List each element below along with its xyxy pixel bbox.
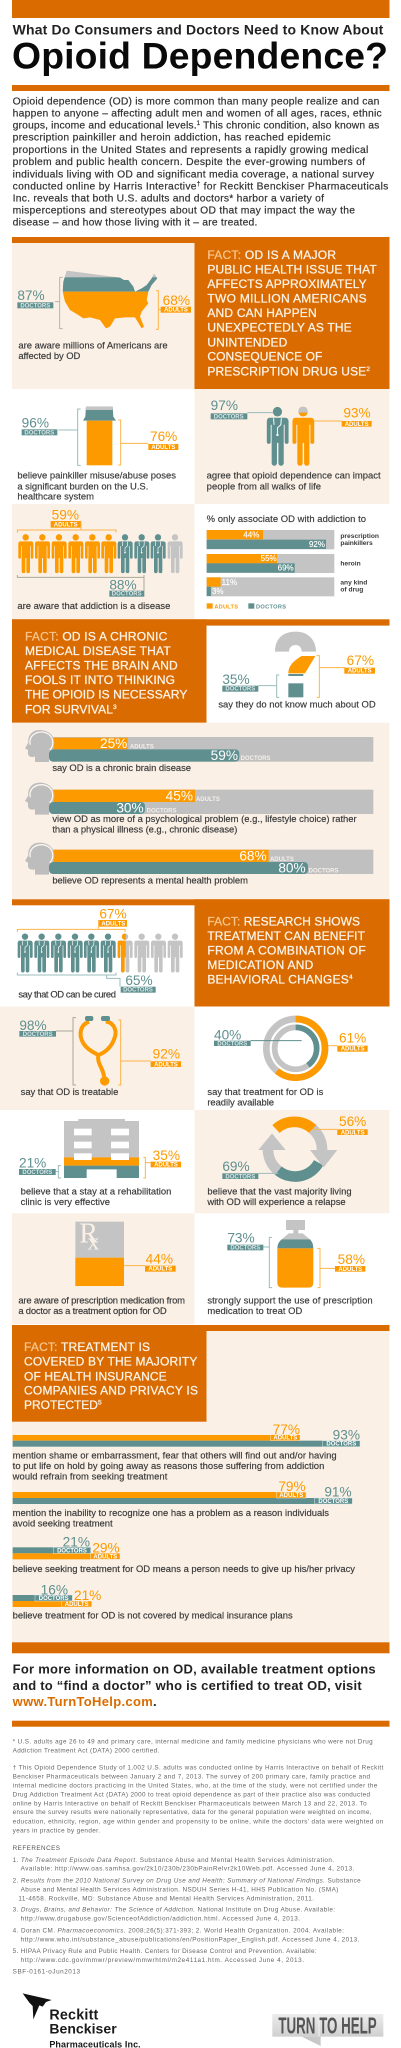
footnotes: [13, 1738, 384, 1835]
intro paragraph: This chronic condition, also known as: [200, 121, 379, 132]
stat: 58% adults: ADULTS: [338, 1267, 362, 1273]
references: Available: http://www.oas.samhsa.gov/2k10/230b/230bPainRelvr2k10Web.pdf. Accessed June 4, 2013.: [21, 1866, 355, 1873]
stat: 59% adults: 59%: [52, 507, 79, 522]
orange divider above fourth fact: [12, 1325, 390, 1331]
caption: healthcare system: [17, 490, 94, 501]
icon: row of ten people: [18, 933, 183, 972]
stat: 65% doctors: DOCTORS: [123, 988, 153, 994]
stat: 92% adults: ADULTS: [154, 1062, 178, 1068]
panel: fact 1: PUBLIC HEALTH ISSUE THAT: [207, 262, 377, 276]
panel: map, millions affected: [12, 243, 194, 389]
row: shame or embarrassment: 93%: [333, 1427, 360, 1442]
caption: [18, 1295, 185, 1316]
footnotes: Benckiser Pharmaceuticals between January 2 and 7, 2013. The survey of 200 primary care, family practice and: [13, 1773, 370, 1780]
intro paragraph: Opioid dependence (OD) is more common than many people realize and can: [13, 96, 380, 107]
row: not covered by insurance: [13, 1582, 293, 1621]
references: 11-4658. Rockville, MD: Substance Abuse and Mental Health Services Administration, 2011.: [18, 1895, 314, 1902]
row: give up privacy: DOCTORS: [57, 1548, 87, 1554]
intro paragraph: [13, 96, 388, 229]
stat: 76% adults: ADULTS: [151, 445, 175, 451]
row: shame or embarrassment: would refrain from seeking treatment: [12, 1471, 168, 1482]
panel: fact 3: [194, 899, 390, 1006]
row: inability to recognize: DOCTORS: [318, 1499, 348, 1505]
panel: fact 4: OF HEALTH INSURANCE: [24, 1369, 167, 1383]
footnotes: years in practice by gender.: [13, 1828, 100, 1835]
footnotes: internal medicine doctors practicing in the United States, who, at the time of the study, were not certified under the: [13, 1782, 378, 1789]
stat: 40% doctors: 40%: [214, 1027, 241, 1042]
intro paragraph: †: [197, 182, 200, 188]
bar chart: 3%: [212, 587, 224, 596]
caption: are aware millions of Americans are: [18, 339, 168, 350]
stat: 73% doctors: DOCTORS: [230, 1246, 260, 1252]
row: inability to recognize: mention the inability to recognize one has a problem as a reason individuals: [13, 1507, 329, 1518]
row: psychological problem: ADULTS: [196, 797, 220, 803]
caption: medication to treat OD: [207, 1305, 303, 1316]
footnotes: education, ethnicity, region, age within gender and propensity to be online, while the doctors’ data were weighted on: [13, 1818, 384, 1825]
stat: 35% adults: 35%: [153, 1148, 180, 1163]
row labels: of drug: [340, 586, 363, 593]
stat: 68% adults: 68%: [163, 293, 190, 308]
row: chronic brain disease: [25, 730, 373, 773]
caption: say that OD can be cured: [18, 988, 116, 999]
panel: fact 4: [12, 1325, 206, 1422]
intro paragraph: Inc. reveals that both U.S. adults and doctors* harbor a variety of: [13, 193, 324, 204]
call to action: [12, 1661, 376, 1709]
row: not covered by insurance: ADULTS: [65, 1602, 89, 1608]
panel: fact 1: UNEXPECTEDLY AS THE: [207, 321, 352, 335]
panel: fact 4: 5: [98, 1400, 102, 1407]
panel: fact 1: AND CAN HAPPEN: [207, 306, 317, 320]
panel: fact 3: MEDICATION AND: [207, 958, 314, 972]
icon: row of ten people: [18, 534, 183, 573]
stat: 88% doctors: 88%: [109, 577, 137, 592]
stat: 61% adults: [337, 1031, 368, 1053]
row labels: any kind: [340, 580, 367, 587]
row: mental health problem: believe OD represents a mental health problem: [52, 874, 248, 885]
row: chronic brain disease: say OD is a chronic brain disease: [52, 762, 191, 773]
panel: fact 1: TWO MILLION AMERICANS: [207, 292, 367, 306]
stat: 44% adults: ADULTS: [148, 1267, 172, 1273]
caption: [207, 1086, 324, 1108]
panel: fact 3: FACT: RESEARCH SHOWS: [207, 914, 360, 928]
row: shame or embarrassment: 77%: [273, 1422, 300, 1437]
panel: fact 2: FOOLS IT INTO THINKING: [25, 673, 175, 687]
references: http://www.who.int/substance_abuse/publications/en/PositionPaper_English.pdf. Accessed June 4, 2013.: [21, 1936, 360, 1943]
stat: 67% adults: 67%: [347, 653, 374, 668]
row: mental health problem: DOCTORS: [309, 869, 338, 875]
intro paragraph: 1: [197, 121, 201, 127]
icon: prescription pad: x: [87, 1229, 99, 1255]
panel: fact 4: PROTECTED: [24, 1398, 98, 1412]
call to action: www.TurnToHelp.com.: [12, 1694, 157, 1709]
icon: prescription pad: [75, 1219, 124, 1286]
panel: fact 2: 3: [113, 704, 117, 711]
stat: 67% adults: [98, 906, 127, 927]
panel: fact 1: AFFECTS APPROXIMATELY: [207, 277, 367, 291]
row: not covered by insurance: DOCTORS: [39, 1596, 69, 1602]
intro paragraph: problem and public health concern. Despite the ever-growing numbers of: [13, 157, 365, 168]
stat: 65% doctors: 65%: [125, 973, 153, 988]
stat: 87% doctors: 87%: [17, 288, 45, 303]
icon: US map split by percentages: [62, 270, 158, 328]
panel: addiction is a disease: [12, 504, 194, 619]
row: shame or embarrassment: [12, 1422, 360, 1482]
references: Abuse and Mental Health Services Administration. NSDUH Series H-41, HHS Publication No. (SMA): [21, 1886, 338, 1893]
intro paragraph: proportions in the United States and represents a rapidly growing medical: [13, 145, 368, 156]
stat: 97% doctors: DOCTORS: [214, 414, 244, 420]
row: shame or embarrassment: DOCTORS: [326, 1442, 356, 1448]
caption: a significant burden on the U.S.: [17, 480, 148, 491]
stat: 56% adults: ADULTS: [341, 1130, 365, 1136]
panel: fact 4: COMPANIES AND PRIVACY IS: [24, 1383, 198, 1397]
panel: fact 2: AFFECTS THE BRAIN AND: [25, 659, 178, 673]
references: [13, 1845, 361, 1975]
caption: say they do not know much about OD: [218, 699, 376, 710]
stat: 59% adults: [51, 507, 81, 528]
icon: question mark: [275, 632, 316, 697]
stat: 61% adults: ADULTS: [341, 1047, 365, 1053]
row: chronic brain disease: 59%: [211, 748, 238, 763]
orange band above call to action: [12, 1642, 390, 1653]
row: inability to recognize: [13, 1479, 352, 1529]
bar chart: 11%: [222, 578, 237, 587]
legend: ADULTS: [214, 604, 238, 610]
logo: Turn To Help: [272, 2012, 383, 2046]
stat: 96% doctors: 96%: [22, 416, 49, 431]
references: 5. HIPAA Privacy Rule and Public Health. Centers for Disease Control and Prevention. Available:: [13, 1948, 317, 1955]
stat: 35% doctors: DOCTORS: [225, 687, 255, 693]
stat: 40% doctors: DOCTORS: [217, 1041, 247, 1047]
intro paragraph: disease – and how those living with it – are treated.: [13, 218, 257, 229]
row: psychological problem: 30%: [116, 801, 144, 816]
caption: [207, 470, 381, 491]
stat: 68% adults: [161, 293, 191, 314]
stat: 67% adults: [344, 653, 375, 675]
stat: 69% doctors: [222, 1159, 258, 1180]
icon: clinic building: [64, 1119, 139, 1178]
stat: 88% doctors: DOCTORS: [112, 592, 142, 598]
caption: readily available: [207, 1097, 274, 1108]
caption: believe painkiller misuse/abuse poses: [17, 470, 176, 481]
logo: Reckitt Benckiser: Benckiser: [49, 2020, 117, 2036]
panel: stethoscope, OD is treatable: [0, 1006, 194, 1110]
stat: 67% adults: 67%: [99, 906, 127, 921]
caption: [206, 1185, 352, 1207]
row: psychological problem: [25, 783, 373, 835]
stat: 40% doctors: [214, 1027, 251, 1047]
panel: Rx, aware of prescription medication: [12, 1213, 194, 1324]
references: SBF-0161-oJun2013: [13, 1968, 80, 1975]
caption: say that OD is treatable: [21, 1086, 118, 1097]
footnotes: Addiction Treatment Act (DATA) 2000 certified.: [13, 1747, 160, 1754]
row: give up privacy: ADULTS: [93, 1554, 117, 1560]
panel: rings, treatment availability: [207, 1019, 368, 1108]
panel: fact 3: 4: [349, 974, 353, 981]
intro paragraph: groups, income and educational levels.: [13, 121, 197, 132]
stat: 21% doctors: DOCTORS: [22, 1170, 52, 1176]
stat: 35% doctors: [222, 672, 258, 693]
panel: cycle arrows, relapse: [194, 1110, 390, 1213]
caption: say that treatment for OD is: [207, 1086, 324, 1097]
stat: 69% doctors: 69%: [222, 1159, 250, 1174]
call to action: For more information on OD, available treatment options: [13, 1661, 376, 1676]
panel: fact 1: PRESCRIPTION DRUG USE: [207, 364, 366, 378]
stat: 98% doctors: DOCTORS: [23, 1032, 53, 1038]
panel: fact 1: 2: [366, 366, 370, 373]
orange divider above second fact: [12, 619, 390, 626]
references: 1. The Treatment Episode Data Report. Substance Abuse and Mental Health Services Administration.: [13, 1857, 334, 1864]
row: not covered by insurance: 21%: [74, 1588, 101, 1603]
call to action: and to “find a doctor” who is certified to treat OD, visit: [13, 1678, 362, 1693]
caption: are aware that addiction is a disease: [17, 600, 170, 611]
intro paragraph: individuals living with OD and significant media coverage, a national survey: [13, 169, 375, 180]
row: not covered by insurance: 16%: [41, 1582, 68, 1597]
panel: fact 2: FOR SURVIVAL: [25, 702, 113, 716]
header band: [12, 0, 390, 18]
caption: [21, 1185, 171, 1207]
row: chronic brain disease: DOCTORS: [241, 756, 270, 762]
row: psychological problem: than a physical illness (e.g., chronic disease): [52, 824, 237, 835]
references: http://www.drugabuse.gov/ScienceofAddiction/addiction.html. Accessed June 4, 2013.: [21, 1916, 300, 1923]
stat: 58% adults: [335, 1252, 365, 1273]
stat: 65% doctors: [121, 973, 156, 994]
stat: 56% adults: [337, 1114, 368, 1136]
row: psychological problem: view OD as more of a psychological problem (e.g., lifestyle choice) rather: [52, 813, 357, 824]
references: 3. Drugs, Brains, and Behavior: The Science of Addiction. National Institute on Drug Abuse. Available:: [13, 1907, 335, 1914]
row: mental health problem: ADULTS: [270, 857, 294, 863]
stat: 35% adults: [151, 1148, 181, 1169]
stat: 88% doctors: [109, 577, 144, 598]
stat: 58% adults: 58%: [338, 1252, 365, 1267]
panel: fact 4: COVERED BY THE MAJORITY: [24, 1355, 197, 1369]
icon: cycle arrows: [258, 1122, 337, 1176]
panel: all walks of life: [194, 389, 390, 504]
footnotes: online by Harris Interactive on behalf of Reckitt Benckiser Pharmaceuticals between March 13 and 22, 2013. To: [13, 1800, 367, 1807]
references: REFERENCES: [13, 1845, 60, 1852]
row: give up privacy: believe seeking treatment for OD means a person needs to give up his/her privacy: [13, 1563, 355, 1574]
caption: with OD will experience a relapse: [206, 1196, 346, 1207]
logo: Reckitt Benckiser: Reckitt: [49, 2007, 99, 2023]
panel: fact 2: MEDICAL DISEASE THAT: [25, 644, 171, 658]
caption: a doctor as a treatment option for OD: [18, 1305, 167, 1316]
stat: 69% doctors: DOCTORS: [225, 1174, 255, 1180]
row: psychological problem: DOCTORS: [147, 809, 176, 815]
references: http://www.cdc.gov/mmwr/preview/mmwrhtml/m2e411a1.htm. Accessed June 4, 2013.: [21, 1957, 304, 1964]
stat: 76% adults: 76%: [150, 429, 177, 444]
caption: people from all walks of life: [207, 480, 321, 491]
row: mental health problem: 80%: [278, 861, 306, 876]
stat: 44% adults: [145, 1251, 176, 1273]
footnotes: † This Opioid Dependence Study of 1,002 U.S. adults was conducted online by Harris Interactive on behalf of Reckitt: [13, 1765, 384, 1772]
icon: prescription pad: R: [79, 1219, 98, 1250]
stat: 92% adults: 92%: [153, 1046, 180, 1061]
caption: clinic is very effective: [21, 1196, 110, 1207]
panel: brain disease perception bars: [12, 723, 390, 899]
orange divider above third fact: [12, 899, 390, 905]
panel: fact 1: FACT: OD IS A MAJOR: [207, 248, 336, 262]
panel: fact 3: TREATMENT CAN BENEFIT: [207, 929, 366, 943]
references: 2. Results from the 2010 National Survey on Drug Use and Health: Summary of National Findings. Substance: [13, 1877, 361, 1884]
row labels: [340, 533, 379, 593]
row: inability to recognize: 79%: [278, 1479, 306, 1494]
stat: 61% adults: 61%: [339, 1031, 366, 1046]
stat: 87% doctors: [17, 288, 53, 309]
stat: 97% doctors: 97%: [211, 398, 238, 413]
orange band below call to action: [12, 1721, 390, 1727]
row: give up privacy: [13, 1535, 355, 1574]
panel: fact 1: UNINTENDED: [207, 335, 288, 349]
intro paragraph: happen to anyone – affecting adult men and women of all ages, races, ethnic: [13, 109, 382, 120]
row: shame or embarrassment: mention shame or embarrassment, fear that others will find out and/or having: [13, 1450, 337, 1461]
row labels: heroin: [340, 561, 361, 568]
row labels: painkillers: [340, 540, 373, 547]
intro paragraph: for Reckitt Benckiser Pharmaceuticals: [200, 181, 388, 192]
row: shame or embarrassment: ADULTS: [273, 1436, 297, 1442]
row: give up privacy: 21%: [63, 1535, 90, 1550]
title: What Do Consumers and Doctors Need to Know About: [13, 21, 384, 37]
row: inability to recognize: 91%: [324, 1485, 352, 1500]
panel: pill bottle, painkiller misuse: [17, 407, 178, 501]
chart heading: % only associate OD with addiction to: [207, 513, 366, 524]
stat: 44% adults: 44%: [146, 1251, 173, 1266]
row: psychological problem: 45%: [166, 789, 193, 804]
stat: 35% adults: ADULTS: [154, 1163, 178, 1169]
caption: [207, 1295, 373, 1316]
intro paragraph: prescription painkiller and heroin addiction, has reached epidemic: [13, 133, 331, 144]
row: not covered by insurance: believe treatment for OD is not covered by medical insurance plans: [13, 1610, 293, 1621]
stat: 98% doctors: [19, 1018, 56, 1038]
stat: 97% doctors: [211, 398, 247, 420]
panel: fact 4: FACT: TREATMENT IS: [24, 1340, 150, 1354]
panel: medicine bottle, support for prescription treatment: [207, 1220, 373, 1316]
panel: fact 2: FACT: OD IS A CHRONIC: [25, 629, 168, 643]
stat: 21% doctors: 21%: [19, 1155, 46, 1170]
bar chart: 44%: [243, 530, 259, 539]
icon: concentric rings: [266, 1019, 325, 1078]
panel: OD can be cured: [17, 906, 183, 999]
bar chart: 55%: [261, 554, 277, 563]
stat: 96% doctors: [22, 416, 57, 436]
stat: 59% adults: ADULTS: [54, 522, 78, 528]
panel: fact 3: BEHAVIORAL CHANGES: [207, 972, 349, 986]
row: chronic brain disease: ADULTS: [130, 744, 154, 750]
caption: [18, 339, 168, 361]
logo: Reckitt Benckiser: [23, 1993, 141, 2048]
icon: stethoscope: [81, 1016, 116, 1086]
bar chart: [207, 530, 334, 596]
stat: 93% adults: 93%: [343, 406, 371, 421]
stat: 56% adults: 56%: [339, 1114, 366, 1129]
footnotes: ensure the survey results were nationally representative, data for the general population were weighted on income,: [13, 1809, 372, 1816]
row: mental health problem: 68%: [239, 849, 267, 864]
icon: pill bottle: [83, 407, 116, 465]
stat: 76% adults: [148, 429, 178, 451]
caption: believe that a stay at a rehabilitation: [21, 1185, 171, 1196]
panel: building, rehabilitation clinic: [19, 1119, 181, 1207]
bar chart: 69%: [278, 563, 294, 572]
stat: 21% doctors: [19, 1155, 56, 1176]
orange divider above first fact: [12, 237, 390, 243]
stat: 73% doctors: [227, 1231, 263, 1252]
stat: 96% doctors: DOCTORS: [24, 430, 54, 436]
caption: affected by OD: [18, 350, 81, 361]
stat: 67% adults: ADULTS: [348, 669, 372, 675]
panel: fact 2: THE OPIOID IS NECESSARY: [25, 687, 187, 701]
stat: 35% doctors: 35%: [222, 672, 250, 687]
footnotes: * U.S. adults age 26 to 49 and primary care, internal medicine and family medicine physicians who were not Drug: [13, 1738, 373, 1745]
icon: doctor and adult figures: [267, 407, 314, 466]
row: inability to recognize: ADULTS: [279, 1493, 303, 1499]
stat: 68% adults: ADULTS: [164, 308, 188, 314]
icon: medicine bottle: [277, 1220, 313, 1288]
row labels: prescription: [340, 533, 379, 540]
title: Opioid Dependence?: [12, 34, 388, 76]
stat: 67% adults: ADULTS: [101, 921, 125, 927]
footnotes: Drug Addiction Treatment Act (DATA) 2000 to treat opioid dependence as part of their practice also was conducted: [13, 1792, 370, 1799]
panel: fact 2: [12, 619, 206, 723]
panel: fact 3: FROM A COMBINATION OF: [207, 943, 366, 957]
panel: question mark, do not know much: [218, 632, 376, 710]
caption: [17, 470, 176, 501]
caption: strongly support the use of prescription: [207, 1295, 373, 1306]
stat: 98% doctors: 98%: [19, 1018, 47, 1033]
stat: 73% doctors: 73%: [227, 1231, 255, 1246]
stat: 92% adults: [151, 1046, 181, 1068]
bar chart: 92%: [309, 540, 325, 549]
stat: 93% adults: ADULTS: [345, 422, 369, 428]
row: mental health problem: [25, 843, 373, 885]
intro paragraph: misperceptions and stereotypes about OD that may impact the way the: [13, 206, 355, 217]
legend: DOCTORS: [256, 604, 286, 610]
panel: fact 1: [194, 237, 390, 389]
caption: believe that the vast majority living: [207, 1185, 352, 1196]
caption: are aware of prescription medication from: [18, 1295, 185, 1306]
stat: 93% adults: [342, 406, 372, 428]
panel: bar chart, association by drug: [207, 513, 379, 610]
row: give up privacy: 29%: [92, 1540, 120, 1555]
row: chronic brain disease: 25%: [100, 736, 127, 751]
legend: [207, 603, 286, 610]
intro paragraph: conducted online by Harris Interactive: [13, 181, 197, 192]
references: 4. Doran CM. Pharmacoeconomics. 2008;26(5):371-393; 2. World Health Organization. 2004. Available:: [13, 1927, 344, 1934]
row: shame or embarrassment: to put life on hold by going away as reasons those suffering from addiction: [13, 1460, 324, 1471]
panel: fact 1: CONSEQUENCE OF: [207, 350, 322, 364]
caption: agree that opioid dependence can impact: [207, 470, 381, 481]
orange divider under title: [12, 85, 390, 91]
panel: treatment barriers background and bars: [12, 1331, 390, 1642]
stat: 87% doctors: DOCTORS: [20, 303, 50, 309]
row: inability to recognize: avoid seeking treatment: [13, 1518, 113, 1529]
